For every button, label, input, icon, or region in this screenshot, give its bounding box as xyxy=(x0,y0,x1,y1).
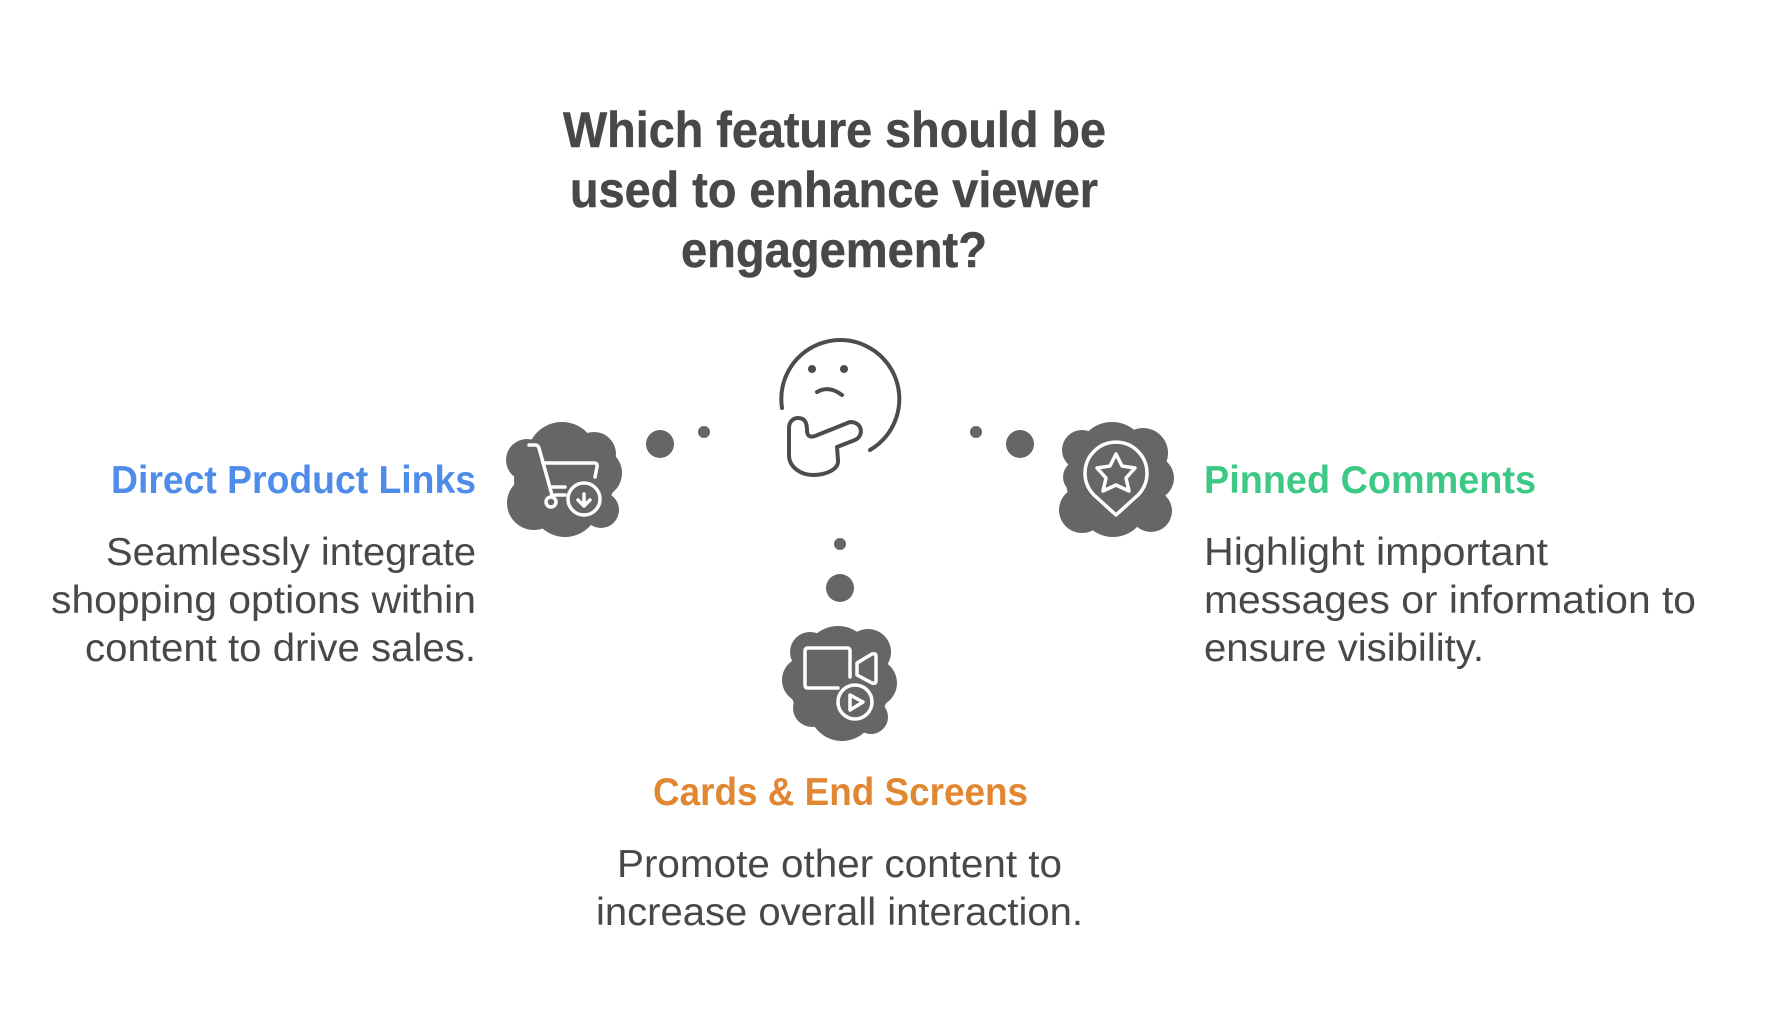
text block: Pinned Comments: messages or information to xyxy=(1204,579,1696,622)
title xyxy=(563,102,1106,278)
text block: Pinned Comments: Highlight important xyxy=(1204,531,1548,574)
text block: Cards & End Screens: increase overall interaction. xyxy=(596,891,1083,934)
connector dots: right xyxy=(970,426,1034,458)
text block: Direct Product Links xyxy=(51,459,476,670)
icon: pinned star blob xyxy=(1059,422,1174,537)
icon: thinking face xyxy=(781,340,899,475)
title: engagement? xyxy=(681,222,987,278)
title: Which feature should be xyxy=(563,102,1106,158)
text block: Cards & End Screens: Cards & End Screens xyxy=(653,771,1028,814)
icon: video play blob xyxy=(782,626,897,741)
text block: Direct Product Links: Seamlessly integrate xyxy=(106,531,476,574)
text block: Direct Product Links: shopping options within xyxy=(51,579,476,622)
connector dots: bottom xyxy=(826,538,854,602)
text block: Pinned Comments: ensure visibility. xyxy=(1204,627,1484,670)
text block: Pinned Comments: Pinned Comments xyxy=(1204,459,1536,502)
text block: Direct Product Links: Direct Product Links xyxy=(111,459,476,502)
text block: Pinned Comments xyxy=(1204,459,1696,670)
icon: shopping cart blob xyxy=(506,422,622,537)
title: used to enhance viewer xyxy=(570,162,1098,218)
connector dots: left xyxy=(646,426,710,458)
text block: Direct Product Links: content to drive sales. xyxy=(85,627,476,670)
text block: Cards & End Screens xyxy=(596,771,1083,934)
text block: Cards & End Screens: Promote other content to xyxy=(617,843,1062,886)
